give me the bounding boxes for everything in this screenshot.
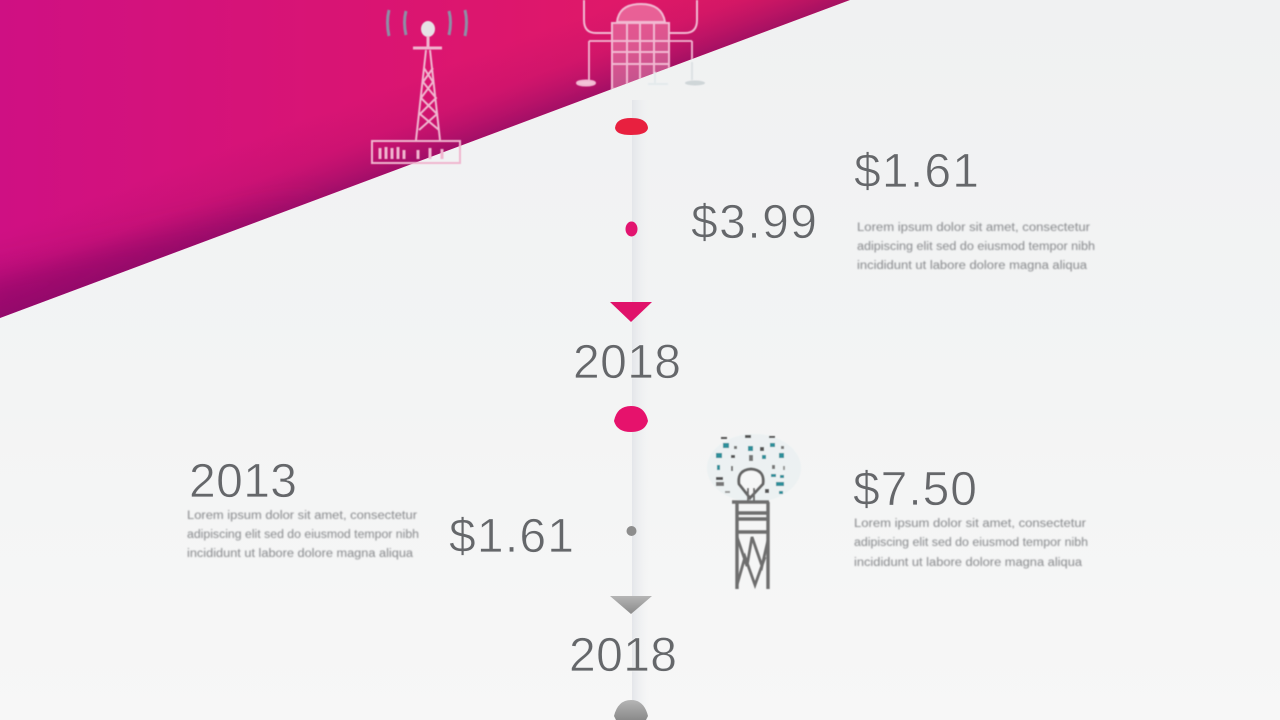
description text [854, 518, 1088, 569]
description text: Lorem ipsum dolor sit amet, consectetur [857, 222, 1090, 234]
value: $1.61 left: $1.61 [449, 510, 574, 563]
value: $1.61: $1.61 [854, 145, 979, 198]
block: top right [854, 145, 1095, 272]
marker: top red dome [615, 118, 648, 135]
value: $7.50: $7.50 [853, 463, 977, 516]
marker: small pink dot [626, 222, 638, 236]
data cloud [707, 434, 801, 502]
block: left 2013 [187, 455, 419, 560]
description text [187, 510, 419, 560]
pink diagonal banner [0, 0, 850, 335]
year: 2018 grey section: 2018 [569, 629, 677, 682]
icon: light bulb tower with data cloud [707, 434, 801, 589]
marker: grey dome [614, 700, 648, 720]
year: 2013: 2013 [189, 455, 297, 508]
year: 2018 pink section: 2018 [573, 336, 681, 389]
description text: adipiscing elit sed do eiusmod tempor nibh [857, 241, 1095, 253]
vertical timeline band [632, 100, 649, 720]
marker: pink triangle [610, 302, 652, 322]
block: bottom right [853, 463, 1088, 569]
icon: building base on light area [648, 62, 705, 86]
icon: domed building [577, 0, 697, 89]
description text: adipiscing elit sed do eiusmod tempor nibh [854, 537, 1088, 549]
lattice tower [732, 488, 769, 589]
icon: radio tower [372, 10, 466, 163]
description text: Lorem ipsum dolor sit amet, consectetur [854, 518, 1086, 530]
value: $3.99: $3.99 [691, 196, 817, 249]
description text: Lorem ipsum dolor sit amet, consectetur [187, 510, 417, 522]
marker: grey triangle [610, 596, 652, 614]
description text: incididunt ut labore dolore magna aliqua [187, 548, 414, 560]
marker: pink dome [614, 406, 648, 432]
description text: adipiscing elit sed do eiusmod tempor nibh [187, 529, 419, 541]
description text: incididunt ut labore dolore magna aliqua [854, 557, 1083, 569]
description text [857, 222, 1095, 272]
description text: incididunt ut labore dolore magna aliqua [857, 260, 1088, 272]
marker: small grey dot [626, 526, 636, 536]
bulb [739, 469, 763, 498]
